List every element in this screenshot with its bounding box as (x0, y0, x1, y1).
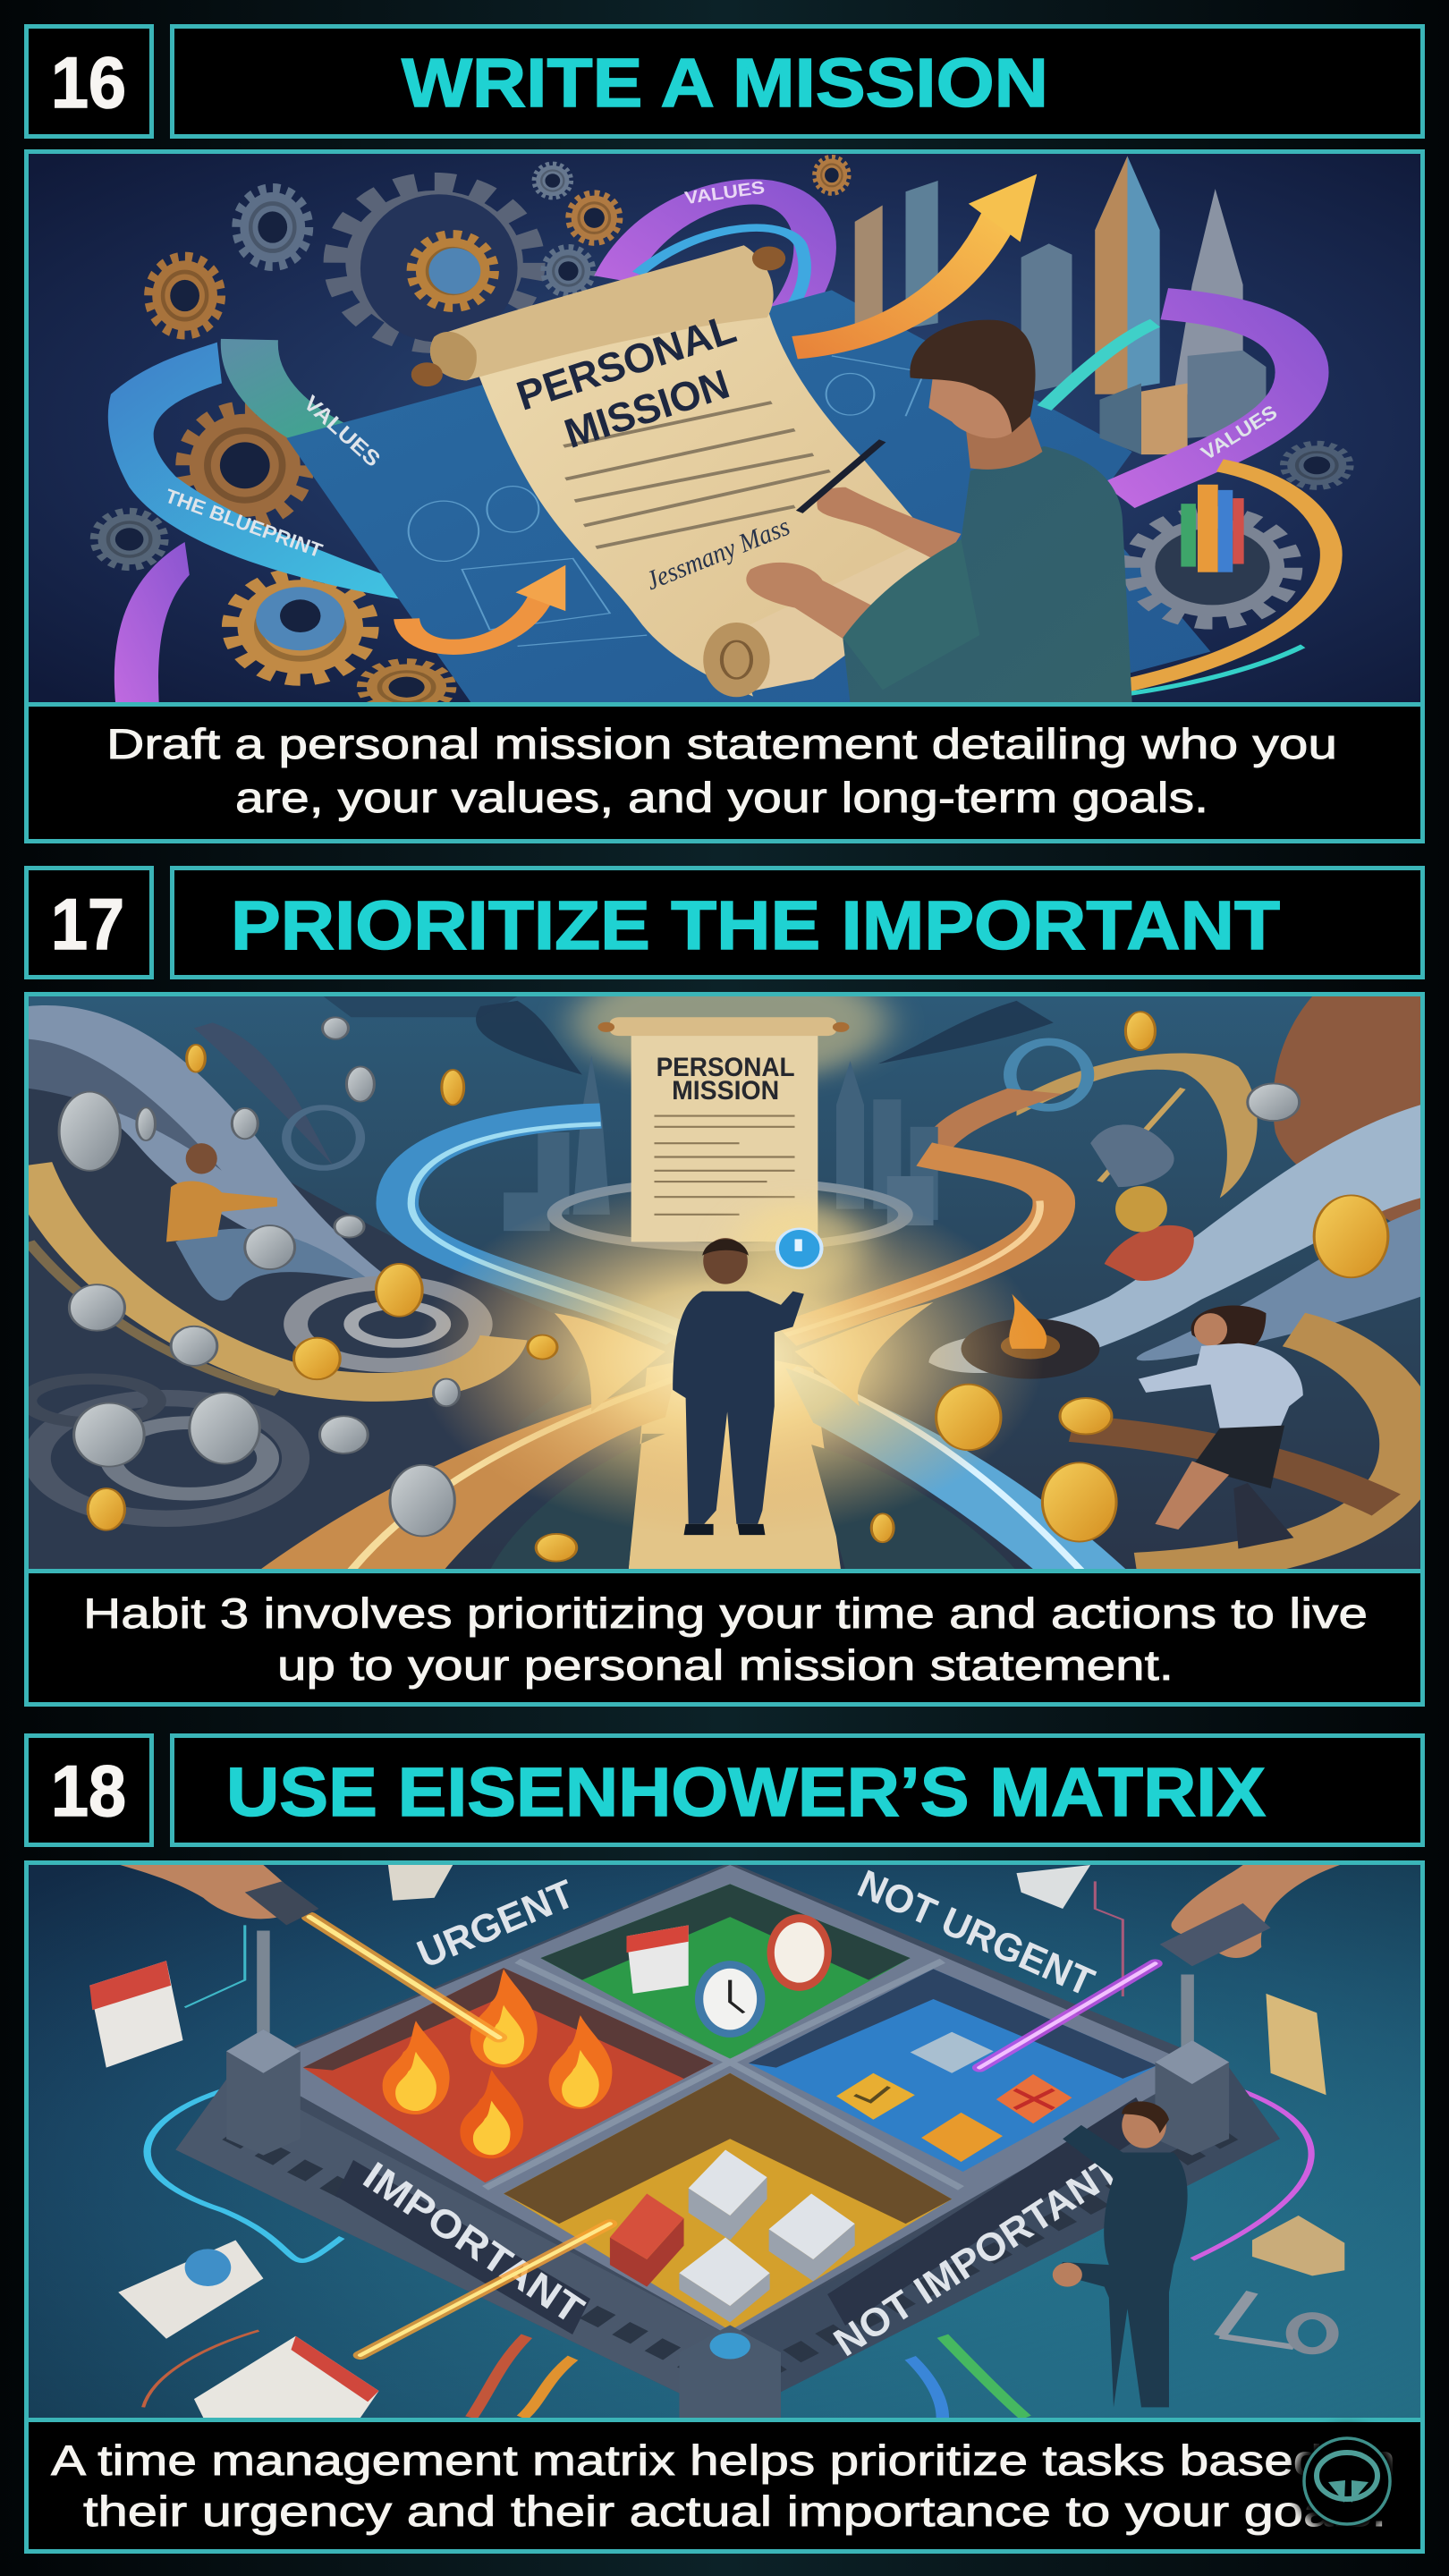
arrow: orange upward large (795, 174, 1037, 348)
title: use eisenhower's matrix (172, 1735, 1422, 1844)
number box 17 (27, 868, 152, 977)
front corner post (679, 2325, 781, 2418)
hand left holding tool (120, 1865, 318, 1925)
caption: step 16: are, your values, and your long-term goals. (235, 774, 1208, 821)
icon: gears upper left (149, 157, 849, 343)
number box 18 (27, 1735, 152, 1844)
lower paper roll (703, 539, 961, 697)
cables behind (143, 1881, 1311, 2407)
scroll: personal mission (597, 1017, 849, 1241)
matrix axis labels: URGENT (411, 1872, 580, 1977)
frame: step 16 (27, 152, 1422, 841)
panel: step 16 (24, 27, 1425, 841)
roads: lower fan (258, 1302, 1127, 1571)
scroll: personal mission: MISSION (672, 1076, 779, 1106)
city skyline (855, 156, 1266, 454)
quadrant: not urgent and important, clocks (540, 1884, 911, 2059)
blueprint sheet (286, 290, 1210, 703)
figure: man in suit with orb (673, 1202, 864, 1535)
panel: step 18 (24, 1735, 1425, 2551)
tool: wrench cable lower right (1220, 2292, 1333, 2351)
center glow (416, 1176, 1044, 1538)
caption: step 18: their urgency and their actual importance to your goals. (83, 2487, 1386, 2535)
figure: man on left wave (166, 1143, 277, 1241)
title: prioritize the important: PRIORITIZE THE IMPORTANT (231, 887, 1280, 964)
figure: man pointing at matrix (1053, 2101, 1188, 2407)
ribbon: blue the blueprint (108, 343, 490, 614)
frame: step 17 (27, 995, 1422, 1705)
text: personal mission (511, 305, 794, 596)
matrix axis labels: NOT IMPORTANT (826, 2148, 1128, 2365)
ribbon: orange right (1026, 465, 1331, 703)
hand right holding tool (1160, 1865, 1340, 1966)
number box 16 (27, 27, 152, 136)
ribbon labels: THE BLUEPRINT (162, 485, 326, 562)
title: write a mission (172, 27, 1422, 136)
ribbon: purple lower left (114, 542, 190, 703)
number box 18: 18 (51, 1751, 126, 1832)
number box 16: 16 (51, 43, 126, 123)
figure: man signing (746, 320, 1132, 703)
ribbon labels: VALUES (299, 391, 385, 472)
background swirl left (28, 1005, 591, 1571)
caption: step 17 (83, 1589, 1368, 1689)
glow above scroll (573, 962, 887, 1083)
quadrant: urgent and not important, tiles (749, 1969, 1157, 2172)
caption: step 17: up to your personal mission statement. (277, 1641, 1174, 1689)
text: personal mission: MISSION (559, 360, 735, 457)
clouds (324, 996, 1054, 1075)
road: orange upper right (785, 1154, 1054, 1335)
illustration: personal mission scroll (29, 154, 1420, 702)
number box 17: 17 (51, 885, 124, 965)
ribbon labels: VALUES (1197, 401, 1281, 464)
caption: step 17: Habit 3 involves prioritizing your time and actions to live (83, 1589, 1368, 1637)
scroll: personal mission: PERSONAL (657, 1053, 795, 1082)
icon: gears lower left (95, 409, 451, 713)
floating items: calendars, notes and cards (89, 1865, 1344, 2418)
icon: watermark logo (1293, 2428, 1401, 2535)
matrix axis labels: IMPORTANT (355, 2154, 591, 2333)
parchment scroll (411, 245, 934, 697)
quadrant: urgent and important, fires (303, 1968, 714, 2182)
arrow: orange small (407, 565, 565, 647)
text: personal mission: PERSONAL (511, 305, 741, 419)
illustration: Eisenhower matrix machine (29, 1862, 1420, 2418)
illustration: man choosing the path (29, 996, 1420, 1569)
ribbon: cyan in city (1044, 323, 1155, 408)
figure: running woman (1139, 1305, 1303, 1548)
city behind scroll (504, 1055, 938, 1231)
caption: step 16: Draft a personal mission statement detailing who you (106, 720, 1337, 767)
beams of light (309, 1917, 1155, 2355)
matrix axis labels: NOT URGENT (852, 1862, 1100, 2005)
title: write a mission: WRITE A MISSION (402, 45, 1048, 122)
quadrant: not urgent and not important, paper stacks (504, 2073, 952, 2331)
ribbon labels (162, 178, 1281, 562)
ribbon labels: VALUES (683, 178, 766, 208)
frame: step 18 (27, 1862, 1422, 2551)
figure: person on right (1090, 1089, 1194, 1281)
background swirl right (924, 996, 1420, 1571)
divider line (24, 2418, 1425, 2422)
ribbon: purple and cyan values loop (614, 191, 815, 328)
coins: gold (88, 1012, 1388, 1562)
text: personal mission: Jessmany Mass (642, 512, 794, 596)
machine base and front walls (175, 1862, 1280, 2418)
ribbon: teal and green values (250, 340, 527, 478)
tower right with emitter (1155, 1974, 1229, 2156)
caption: step 16 (106, 720, 1337, 821)
tower left with emitter (226, 1930, 301, 2156)
matrix cross dividers (485, 1961, 961, 2188)
matrix axis labels (335, 1862, 1154, 2365)
title: prioritize the important (172, 868, 1422, 977)
caption: step 18 (51, 2436, 1395, 2535)
swirl at scroll base (555, 1182, 906, 1248)
divider line (24, 702, 1425, 707)
icon: gear and bar chart right (1133, 444, 1350, 622)
divider line (24, 1569, 1425, 1573)
caption: step 18: A time management matrix helps prioritize tasks based on (51, 2436, 1395, 2484)
ribbon: purple values right (1118, 304, 1302, 496)
colored cables front (471, 2336, 1026, 2418)
title: use eisenhower's matrix: USE EISENHOWER’S MATRIX (226, 1754, 1266, 1831)
road: blue upper left (397, 1116, 679, 1335)
coins: silver (59, 1017, 1300, 1536)
panel: step 17 (24, 868, 1425, 1705)
